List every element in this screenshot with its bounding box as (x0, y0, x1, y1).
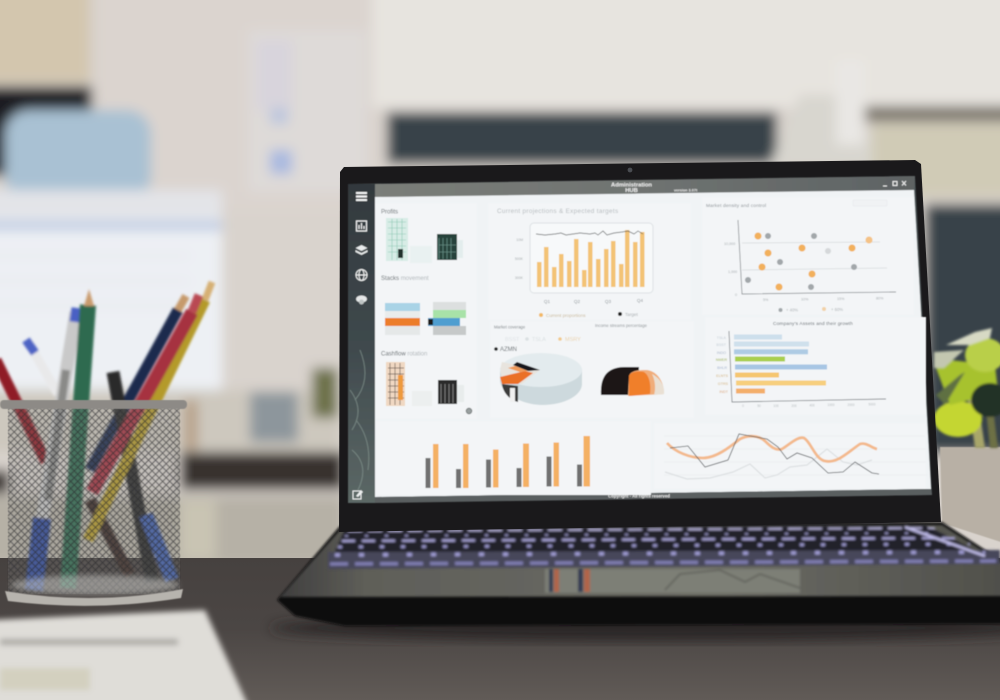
heading: income streams: Income streams percentage (595, 323, 648, 328)
target line (536, 231, 643, 235)
half donut chart (601, 367, 664, 396)
bar chart bars (537, 230, 644, 287)
pie chart (500, 353, 582, 405)
quarter labels: Q4 (637, 298, 644, 303)
pen holder with pencils (0, 282, 212, 606)
chart heading: Current projections & Expected targets (497, 208, 618, 215)
scatter legend: + 60% (831, 307, 843, 312)
bar labels: ELNTS (716, 374, 729, 378)
quarter labels: Q2 (574, 299, 581, 304)
x axis labels: 1000 (827, 403, 835, 407)
x axis labels: 50 (757, 404, 761, 408)
panel: bottom bar chart (376, 421, 651, 495)
thumbnail: profits (386, 218, 463, 263)
icon: globe (356, 270, 367, 280)
panel: scatter plot (702, 197, 914, 315)
pie legend (494, 337, 581, 353)
pie legend: TSLA (532, 337, 546, 343)
horizontal bars (734, 334, 827, 394)
sidebar (348, 184, 375, 503)
title bar (375, 176, 915, 197)
axis labels: 10% (801, 298, 809, 302)
bottom status bar (375, 489, 932, 503)
scatter points (754, 232, 872, 290)
bar chart frame (530, 223, 653, 293)
bar labels (716, 336, 729, 394)
heading: assets: Company's Assets and their growth (773, 321, 853, 327)
pencils and pens (0, 282, 212, 590)
icon: menu (356, 192, 367, 201)
keyboard (328, 525, 1000, 569)
heading: stacks: Stacks movement (381, 276, 429, 282)
pie legend: MSRY (565, 337, 581, 343)
dark series (670, 434, 879, 474)
cup base rim (5, 589, 183, 606)
laptop (270, 160, 1000, 641)
y axis labels (515, 238, 524, 280)
orange series (667, 436, 877, 461)
y axis labels: 500K (515, 257, 524, 261)
version label: version 3.07t (674, 188, 698, 192)
panel: line chart (654, 423, 927, 489)
axis labels: 80% (876, 296, 884, 300)
x axis labels: 2000 (847, 403, 855, 407)
app title: Administration (611, 182, 652, 188)
icon: edit (353, 490, 363, 499)
bar labels: BHLR (717, 366, 727, 370)
dashboard area (375, 190, 931, 497)
window controls (883, 181, 906, 186)
icon: cloud (356, 296, 367, 304)
x axis labels: 5000 (868, 402, 876, 406)
x axis labels: 200 (791, 404, 797, 408)
thumbnail: stacks (385, 302, 466, 335)
axes (729, 331, 886, 402)
panel: profits, stacks, cashflow (375, 203, 477, 419)
x axis labels: 400 (809, 404, 815, 408)
bar labels: BSST (716, 343, 727, 347)
quarter labels (544, 298, 644, 304)
quarter labels: Q3 (605, 299, 612, 304)
y axis labels: 10M (516, 238, 523, 242)
x axis labels: 0 (742, 404, 744, 408)
quarter labels: Q1 (544, 299, 551, 304)
grey series (665, 449, 872, 479)
plant leaves (934, 328, 1000, 448)
chart legend: Target (625, 312, 638, 317)
laptop base (277, 522, 1000, 626)
x axis labels: 100 (773, 404, 779, 408)
mesh cup (8, 404, 180, 595)
scatter legend (778, 307, 843, 312)
icon: chart box (356, 221, 366, 231)
bar labels: TSLA (717, 336, 727, 340)
heading: profits: Profits (381, 210, 398, 216)
webcam (628, 168, 632, 172)
axis labels (724, 242, 884, 302)
axis labels: 5% (763, 298, 769, 302)
x axis labels (742, 402, 876, 408)
chart legend (539, 312, 638, 318)
axis labels: 0 (735, 293, 737, 297)
icon: settings circle (466, 408, 472, 414)
bar labels: INDT (719, 390, 729, 394)
search box (853, 200, 887, 206)
pie legend: AZMN (500, 347, 517, 353)
panel: market coverage (490, 321, 694, 418)
heading: market coverage: Market coverage (494, 324, 526, 330)
chart legend: Current proportions (546, 313, 586, 318)
icon: layers (356, 245, 368, 255)
panel: projections chart (488, 203, 691, 320)
paper on desk (0, 610, 250, 700)
y axis labels: 300K (515, 276, 524, 280)
laptop shadow (270, 615, 1000, 641)
bar labels: GTRS (718, 382, 729, 386)
plant (934, 328, 1000, 545)
cup top rim (0, 400, 187, 409)
title bar: HUB (625, 188, 638, 194)
axes (738, 220, 896, 294)
heading: market density: Market density and control (706, 203, 766, 209)
scatter legend: + 40% (786, 308, 798, 312)
trackpad reflection (545, 569, 800, 593)
thumbnail: cashflow (386, 362, 464, 406)
axis labels: 15% (837, 297, 845, 301)
axis labels: 1,000 (728, 270, 737, 274)
desk surface (0, 558, 1000, 700)
pie legend: BSST (505, 337, 520, 343)
bar labels: NWER (716, 358, 727, 362)
bar labels: INDO (717, 351, 726, 355)
bottom status bar: Copyright - All rights reserved (608, 494, 670, 498)
screen (348, 176, 932, 503)
panel: assets bar chart (705, 317, 926, 415)
plant pot (940, 447, 1000, 545)
axis labels: 10,000 (724, 242, 735, 246)
heading: cashflow: Cashflow rotation (381, 352, 427, 358)
laptop lid (339, 160, 941, 532)
